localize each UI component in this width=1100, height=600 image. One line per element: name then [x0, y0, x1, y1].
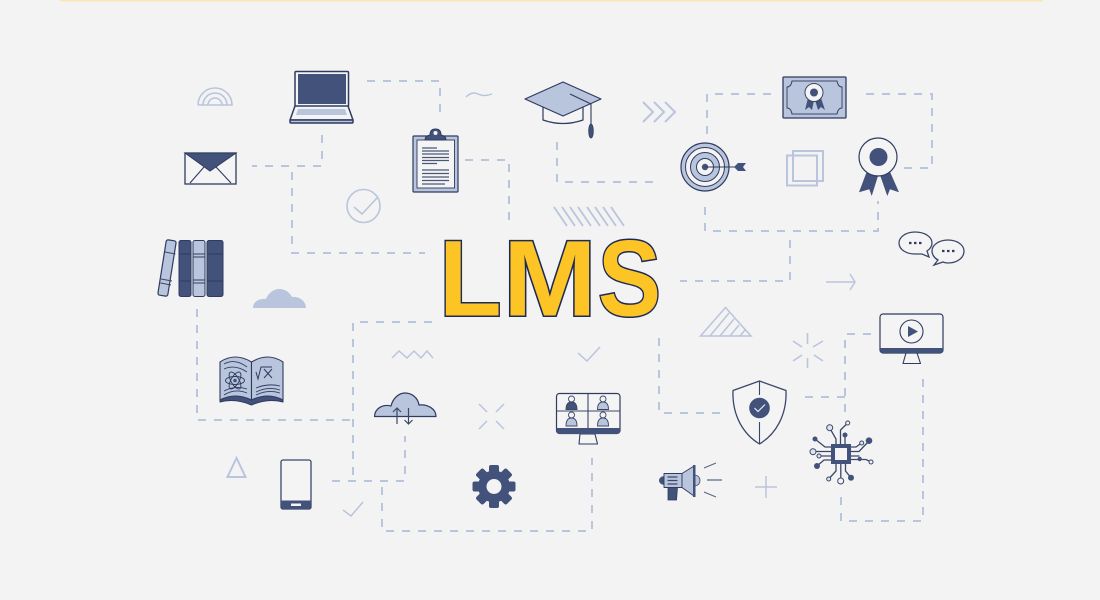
title: LMS: M — [503, 218, 597, 339]
decoration: diagonal stripes — [554, 207, 624, 226]
icon: chat bubbles — [899, 232, 964, 265]
title: LMS — [439, 218, 661, 339]
icon: video monitor — [880, 314, 943, 364]
decoration: check mark — [343, 502, 363, 516]
icon: award ribbon — [859, 138, 899, 196]
icon: graduation cap — [525, 82, 601, 138]
icon: envelope — [185, 153, 236, 184]
decoration: zigzag — [392, 351, 433, 358]
icon: open science book — [220, 357, 283, 405]
title: LMS: L — [439, 219, 502, 339]
icon: mobile phone — [281, 460, 311, 509]
icon: target with arrow — [681, 143, 746, 191]
icon: video meeting monitor — [556, 394, 620, 444]
icon: gear — [472, 465, 516, 508]
decoration: starburst — [793, 333, 823, 368]
icon: certificate — [783, 77, 846, 118]
title: LMS: S — [598, 218, 661, 339]
icon: rainbow arcs — [198, 88, 232, 105]
icon: microchip — [810, 421, 873, 484]
icon: laptop — [290, 72, 353, 123]
decoration: check mark — [578, 347, 600, 361]
icon: upload download cloud — [374, 393, 436, 424]
decoration: triangle — [228, 458, 246, 477]
icon: megaphone — [659, 463, 722, 500]
icon: clipboard — [413, 129, 458, 192]
decoration: overlapping squares — [787, 151, 823, 186]
decoration: chevrons — [643, 102, 675, 122]
icon: row of books — [158, 240, 223, 296]
decoration: squiggle — [466, 93, 492, 97]
decoration: plus sign — [755, 476, 777, 498]
icon: pale cloud — [253, 289, 306, 308]
icon: security shield — [733, 381, 786, 444]
decoration: hatched triangle — [700, 308, 751, 336]
decoration: thin arrow — [826, 274, 855, 290]
decoration: burst cross — [479, 404, 504, 429]
icon: check circle — [347, 190, 380, 222]
dashed connector network — [197, 81, 932, 531]
